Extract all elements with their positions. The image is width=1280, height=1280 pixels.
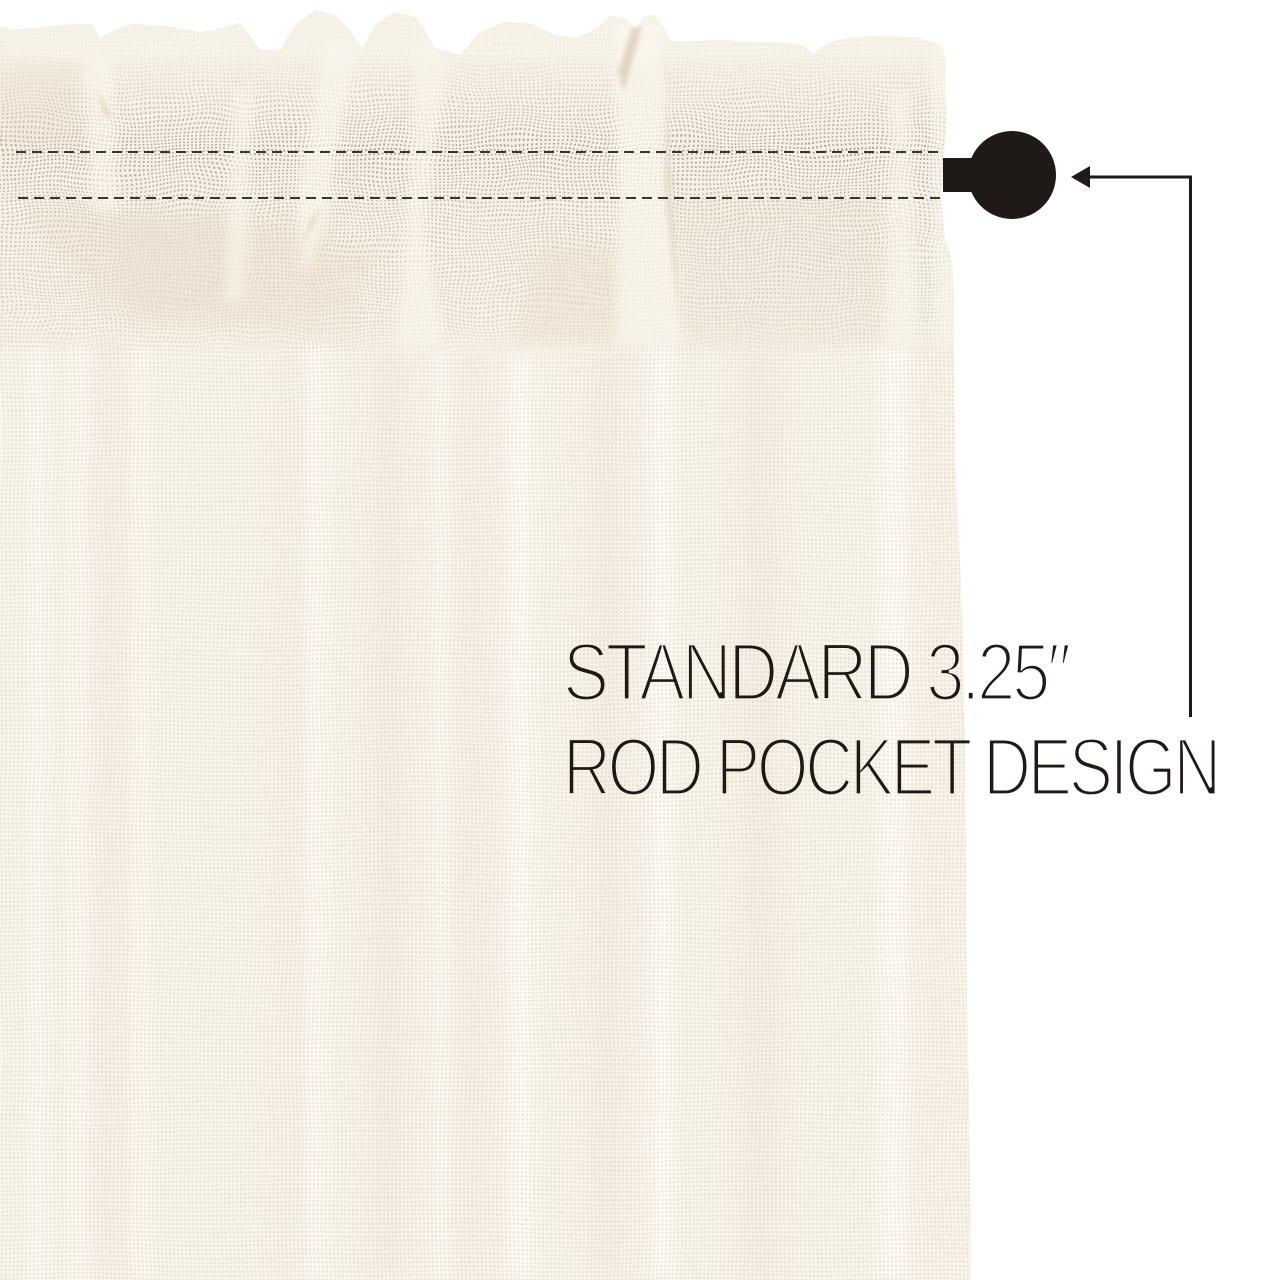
header weave [0, 0, 990, 360]
rod stem [943, 158, 979, 192]
lower fabric weave [0, 330, 980, 1280]
rod finial [968, 131, 1056, 219]
top stitch dashed line [16, 151, 938, 153]
curtain rod [943, 131, 1056, 219]
caption line 1: STANDARD 3.25″ [563, 627, 1070, 718]
arrow pointing to rod [1071, 166, 1190, 717]
header shading and gathers [0, 5, 960, 345]
curtain fabric [0, 0, 990, 1280]
rod pocket header [0, 0, 990, 360]
lower fabric vertical folds [316, 349, 904, 1274]
bottom stitch dashed line [18, 197, 941, 199]
caption [563, 627, 1218, 813]
